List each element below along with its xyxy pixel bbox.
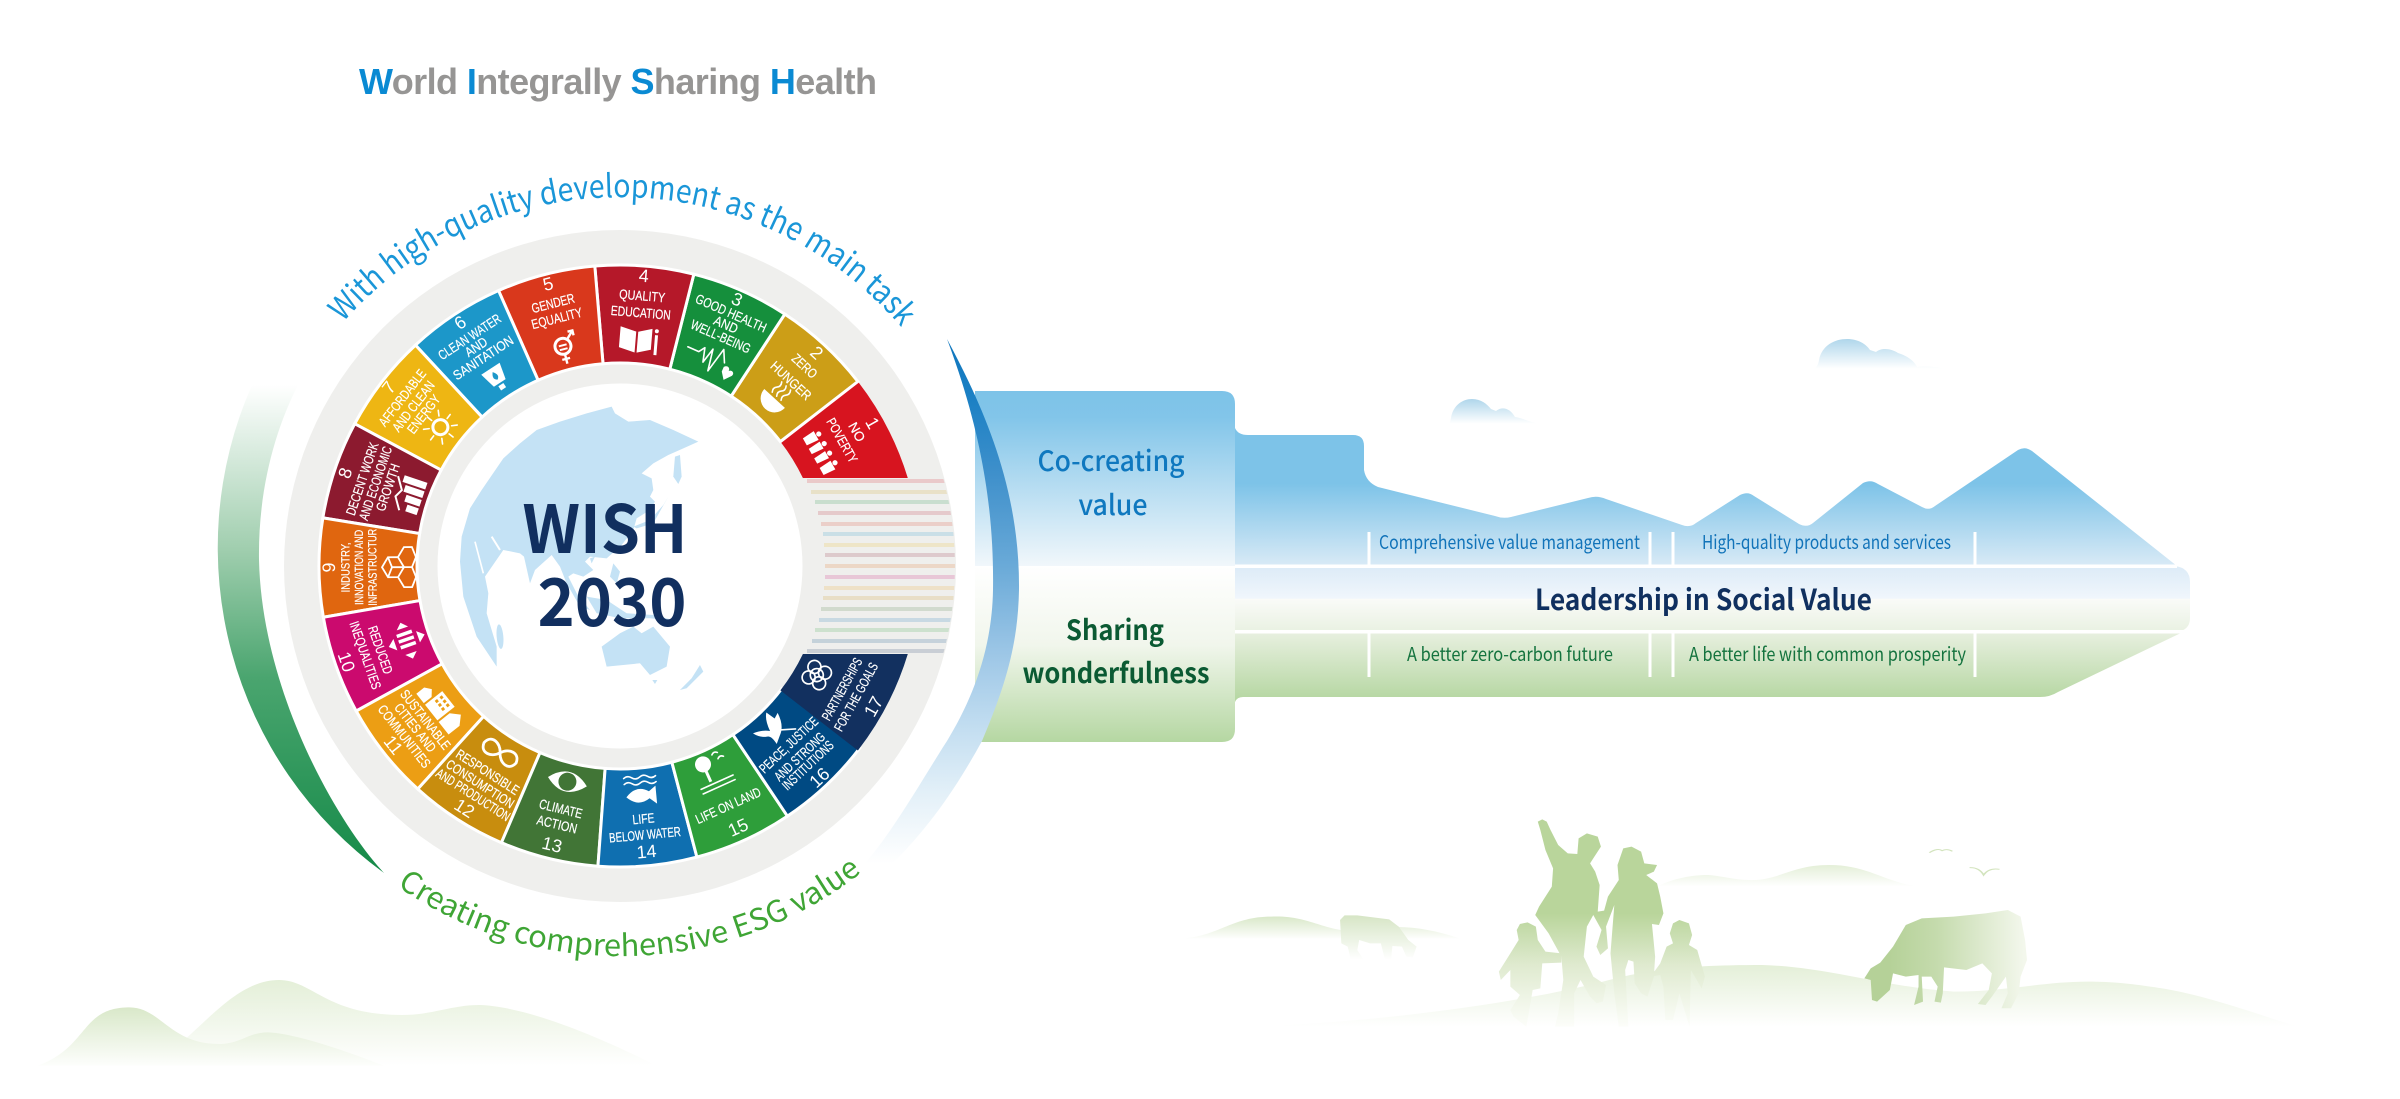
- key shaft: middle band: [1235, 566, 2190, 632]
- title: World Integrally Sharing Health: [359, 61, 877, 102]
- goal 5 segment: 5: [541, 273, 555, 295]
- goal 4 segment: 4: [638, 266, 650, 286]
- goal 5 segment: [497, 262, 619, 384]
- goal 16 segment: INSTITUTIONS: [779, 738, 837, 793]
- text: a better zero-carbon future: A better zero-carbon future: [1407, 640, 1613, 667]
- goal 11 segment: 11: [380, 732, 407, 759]
- heading: WISH 2030: [522, 477, 688, 646]
- heading: WISH 2030: 2030: [538, 550, 686, 646]
- goal 10 segment: [319, 585, 447, 712]
- text: sharing wonderfulness: wonderfulness: [1022, 652, 1210, 692]
- goal 17 segment: PARTNERSHIPS: [819, 655, 865, 723]
- gray ring: [284, 230, 956, 902]
- cow large: [1864, 910, 2027, 1008]
- goal 15 segment: LIFE ON LAND: [693, 784, 763, 827]
- text: leadership in social value: Leadership in Social Value: [1535, 577, 1872, 619]
- blue crescent: [860, 339, 1019, 881]
- hill: foreground ground: [1258, 965, 2298, 1027]
- text: co-creating value: Co-creating: [1038, 440, 1184, 480]
- goal 7 segment: ENERGY: [404, 392, 443, 437]
- goal 1 segment: 1: [861, 414, 884, 432]
- goal 15 segment: 15: [725, 814, 751, 841]
- goal 8 segment: GROWTH: [373, 462, 403, 513]
- goal 8 segment: DECENT WORK: [343, 440, 382, 517]
- goal 3 segment: [655, 270, 787, 403]
- goal 2 segment: ZERO: [789, 351, 820, 381]
- goal 11 segment: COMMUNITIES: [375, 702, 434, 771]
- globe: [460, 407, 703, 690]
- goal 7 segment: 7: [378, 377, 400, 398]
- goal 13 segment: ACTION: [535, 812, 579, 837]
- goal 12 segment: [416, 708, 554, 846]
- goal 4 segment: [587, 262, 694, 371]
- goal 9 segment: INNOVATION AND: [352, 530, 366, 605]
- goal 17 segment: FOR THE GOALS: [831, 660, 881, 734]
- heading: WISH 2030: WISH: [522, 477, 688, 573]
- goal 3 segment: AND: [711, 313, 741, 337]
- goal 3 segment: GOOD HEALTH: [693, 291, 769, 335]
- goal 8 segment: [319, 422, 446, 549]
- goal 6 segment: CLEAN WATER: [435, 311, 504, 363]
- key shaft: mountain top: [1235, 428, 2177, 566]
- cloud large: [1810, 339, 1964, 374]
- goal 1 segment: [780, 382, 908, 478]
- goal 15 segment: [657, 728, 789, 861]
- goal 9 segment: [319, 517, 420, 617]
- goal 13 segment: CLIMATE: [538, 796, 584, 821]
- goal 2 segment: 2: [806, 342, 827, 364]
- goal 6 segment: 6: [451, 312, 470, 334]
- goal 6 segment: AND: [462, 334, 490, 360]
- bottom right scene: [1185, 819, 2298, 1027]
- goal 2 segment: HUNGER: [767, 358, 815, 403]
- goal 12 segment: RESPONSIBLE: [453, 746, 522, 798]
- goal 16 segment: [721, 678, 863, 819]
- goal 14 segment: [589, 761, 697, 870]
- goal 10 segment: 10: [334, 649, 359, 675]
- panel: key head sharing wonderfulness: [975, 566, 1235, 742]
- cloud small: [1447, 399, 1581, 428]
- goal 4 segment: EDUCATION: [610, 303, 671, 323]
- goal 3 segment: 3: [728, 288, 746, 311]
- goal 10 segment: REDUCED: [365, 624, 396, 676]
- arc text: comprehensive ESG value: Creating comprehensive ESG value: [402, 862, 860, 961]
- goal 2 segment: [719, 311, 861, 453]
- goal 14 segment: BELOW WATER: [608, 824, 682, 846]
- family silhouette: [1499, 819, 1705, 1027]
- goal 10 segment: INEQUALITIES: [346, 619, 384, 691]
- text: sharing wonderfulness: [1022, 609, 1210, 692]
- goal 7 segment: AND CLEAN: [389, 378, 438, 435]
- hill: far right: [1657, 865, 1919, 887]
- green crescent: [218, 385, 384, 873]
- goal 12 segment: CONSUMPTION: [443, 757, 517, 811]
- goal 17 segment: [780, 636, 908, 750]
- faded goal stripes: [807, 479, 957, 653]
- goal 6 segment: SANITATION: [450, 333, 516, 383]
- goal 16 segment: PEACE, JUSTICE: [756, 714, 821, 776]
- goal 3 segment: WELL-BEING: [688, 317, 753, 356]
- goal 16 segment: 16: [805, 764, 834, 792]
- goal 14 segment: LIFE: [632, 810, 655, 827]
- birds: [1929, 850, 2000, 875]
- text: co-creating value: [1038, 440, 1184, 524]
- goal 17 segment: 17: [860, 693, 887, 720]
- goal 1 segment: NO: [845, 420, 868, 444]
- goal 13 segment: [500, 749, 621, 870]
- goal 7 segment: [351, 342, 492, 483]
- goal 13 segment: 13: [540, 833, 564, 857]
- goal 11 segment: [353, 651, 494, 792]
- text: sharing wonderfulness: Sharing: [1066, 609, 1164, 649]
- bottom left hills: [38, 980, 652, 1066]
- hill: far left: [1185, 917, 1459, 938]
- goal 9 segment: 9: [319, 562, 339, 573]
- white center disc: [438, 384, 802, 748]
- goal 8 segment: AND ECONOMIC: [356, 444, 395, 522]
- key shaft: green bottom: [1235, 632, 2183, 702]
- goal 9 segment: INFRASTRUCTUR: [365, 529, 380, 606]
- goal 11 segment: CITIES AND: [391, 700, 439, 755]
- goal 1 segment: POVERTY: [823, 415, 861, 465]
- goal 14 segment: 14: [636, 841, 657, 863]
- text: comprehensive value management: Comprehensive value management: [1379, 528, 1640, 555]
- cow small: [1340, 915, 1417, 960]
- goal 16 segment: AND STRONG: [771, 729, 828, 784]
- goal 7 segment: AFFORDABLE: [376, 366, 429, 429]
- text: a better life with common prosperity: A better life with common prosperity: [1689, 640, 1966, 667]
- panel: key head co-creating value: [975, 391, 1235, 566]
- goal 9 segment: INDUSTRY,: [338, 542, 353, 592]
- text: co-creating value: value: [1078, 484, 1148, 524]
- goal 11 segment: SUSTAINABLE: [397, 687, 454, 753]
- goal 12 segment: AND PRODUCTION: [433, 766, 513, 824]
- goal 6 segment: [413, 287, 552, 426]
- white divider lines: [1235, 532, 2185, 677]
- arc text: high-quality development: With high-quality development as the main task: [326, 172, 914, 327]
- goal 12 segment: 12: [451, 795, 478, 822]
- goal 5 segment: EQUALITY: [530, 305, 584, 332]
- goal 5 segment: GENDER: [530, 291, 576, 316]
- goal 4 segment: QUALITY: [619, 287, 666, 305]
- goal 8 segment: 8: [334, 465, 356, 481]
- text: high-quality products and services: High-quality products and services: [1702, 528, 1951, 555]
